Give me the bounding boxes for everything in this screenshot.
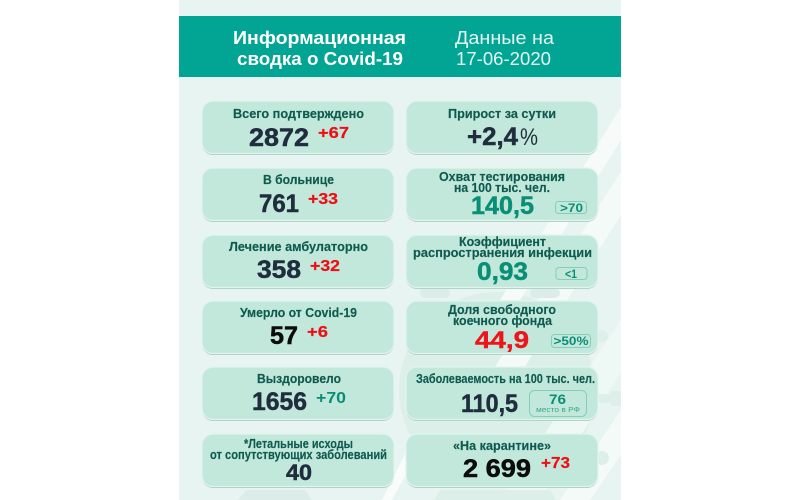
card: comorbidity deaths: *Летальные исходы: [244, 437, 353, 451]
date: [455, 28, 555, 69]
card: incidence per 100k: [406, 367, 598, 421]
card: incidence per 100k: 76: [549, 391, 566, 407]
title: Информационная: [233, 28, 406, 48]
card: testing coverage: на 100 тыс. чел.: [454, 181, 550, 195]
card: total confirmed: [202, 101, 394, 155]
card: free bed share: Доля свободного: [448, 303, 556, 317]
card: recovered: [202, 367, 394, 421]
header banner: [179, 16, 621, 77]
card: daily growth: +2,4: [467, 123, 518, 151]
card: quarantine: «На карантине»: [453, 439, 551, 453]
card: infection rate: <1: [565, 267, 577, 281]
card: daily growth: Прирост за сутки: [448, 107, 556, 121]
card: free bed share: коечного фонда: [453, 314, 553, 328]
card: free bed share: >50%: [554, 334, 589, 348]
card: total confirmed: Всего подтверждено: [233, 107, 364, 121]
card: comorbidity deaths: от сопутствующих заболеваний: [210, 448, 387, 462]
background panel: [179, 0, 621, 500]
card: outpatient: Лечение амбулаторно: [229, 240, 368, 254]
card: in hospital: 761: [259, 190, 299, 218]
card: outpatient: [202, 235, 394, 289]
date: 17-06-2020: [456, 49, 551, 69]
card: infection rate: распространения инфекции: [413, 246, 592, 260]
card: deaths: +6: [307, 324, 328, 341]
card: incidence per 100k: 110,5: [461, 390, 518, 418]
card: daily growth: [406, 101, 598, 155]
card: in hospital: [202, 168, 394, 222]
card: outpatient: 358: [257, 256, 301, 284]
card: deaths: Умерло от Covid-19: [240, 306, 357, 320]
card: daily growth: %: [520, 124, 538, 151]
card: testing coverage: [406, 168, 598, 222]
card: infection rate: Коэффициент: [459, 235, 546, 249]
card: incidence per 100k: место в РФ: [536, 405, 580, 414]
card: recovered: Выздоровело: [257, 372, 341, 386]
card: outpatient: +32: [310, 258, 340, 275]
card: free bed share: 44,9: [475, 327, 529, 354]
card: infection rate: 0,93: [477, 258, 528, 286]
card: quarantine: +73: [541, 455, 570, 472]
card: free bed share: [406, 301, 598, 355]
card: infection rate: [406, 235, 598, 289]
date: Данные на: [455, 28, 555, 48]
card: in hospital: В больнице: [263, 173, 334, 187]
card: deaths: 57: [270, 322, 298, 350]
title: сводка о Covid-19: [237, 49, 403, 69]
card: recovered: +70: [316, 390, 346, 407]
card: testing coverage: Охват тестирования: [439, 170, 565, 184]
card: comorbidity deaths: 40: [286, 460, 312, 485]
card: testing coverage: >70: [560, 201, 583, 215]
card: testing coverage: 140,5: [471, 192, 534, 220]
card: quarantine: 2 699: [463, 455, 531, 483]
card: total confirmed: 2872: [249, 124, 309, 152]
card: recovered: 1656: [252, 388, 307, 416]
card: incidence per 100k: Заболеваемость на 100 тыс. чел.: [416, 372, 595, 386]
card: in hospital: +33: [308, 191, 338, 208]
card: comorbidity deaths: [202, 434, 394, 488]
card: deaths: [202, 301, 394, 355]
card: quarantine: [406, 434, 598, 488]
title: [233, 28, 406, 69]
card: total confirmed: +67: [318, 125, 349, 142]
